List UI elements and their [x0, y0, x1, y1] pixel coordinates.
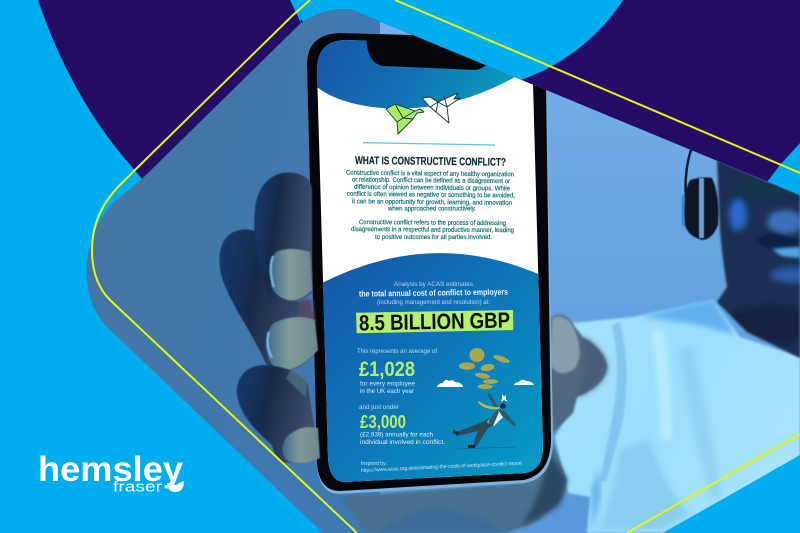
icon: white origami bird	[422, 93, 460, 123]
thumb	[548, 314, 607, 433]
illustration: falling man	[452, 393, 516, 449]
shirt	[555, 299, 800, 533]
text block: ACAS analysis: Analysis by ACAS estimates	[394, 281, 474, 288]
screen top blue curve	[317, 40, 515, 108]
text: per individual: (£2,939) annually for each	[360, 432, 433, 438]
text block: explanation: to positive outcomes for all parties involved.	[375, 234, 492, 241]
heading: what is constructive conflict: WHAT IS CONSTRUCTIVE CONFLICT?	[355, 155, 506, 169]
finger: ring	[237, 365, 320, 463]
photo backdrop right	[380, 0, 800, 533]
face and neck	[716, 160, 800, 359]
text block: definition: when approached constructively.	[387, 206, 476, 213]
finger: middle	[219, 229, 318, 372]
logo: hemsley fraser: fraser	[113, 478, 162, 496]
text block: ACAS analysis	[359, 281, 508, 306]
text block: definition	[346, 170, 515, 213]
finger: index	[254, 173, 312, 302]
text: per employee: for every employee	[360, 380, 415, 388]
shape: cyan corner	[768, 143, 800, 195]
text block: definition: it can be an opportunity for growth, learning, and innovation	[352, 198, 512, 207]
callout: 8.5 billion GBP: 8.5 BILLION GBP	[359, 308, 510, 335]
text block: definition: or relationship. Conflict can be defined as a disagreement or	[352, 176, 511, 185]
divider line	[363, 143, 495, 145]
text: source: https://www.acas.org.uk/estimating-the-costs-of-workplace-conflict-report	[361, 461, 522, 474]
shape: purple top right	[300, 0, 800, 200]
shape: top overlay clipped to photo edge	[300, 0, 800, 195]
text block: explanation: disagreements in a respectful and productive manner, leading	[351, 226, 514, 234]
illustration: clouds	[437, 380, 534, 387]
text: per individual	[360, 432, 444, 444]
text: average intro: This represents an average of	[357, 348, 437, 355]
phone frame	[307, 33, 553, 494]
text: just under: and just under	[359, 404, 400, 411]
text block: ACAS analysis: (including management and resolution) at:	[377, 299, 490, 306]
illustration: falling coins	[459, 348, 510, 389]
screen lower blue panel	[320, 253, 550, 490]
phone screen	[310, 35, 550, 490]
phone notch	[366, 39, 486, 70]
stat: £3,000: £3,000	[360, 411, 406, 432]
photo backdrop left	[60, 0, 380, 533]
text block: explanation: Constructive conflict refers to the process of addressing	[359, 219, 506, 227]
text block: definition: difference of opinion between individuals or groups. While	[354, 184, 510, 192]
shape: purple left arc	[38, 0, 301, 179]
icon: green origami bird	[386, 104, 424, 134]
shape: cyan circle	[300, 0, 624, 80]
text block: definition: Constructive conflict is a vital aspect of any healthy organization	[346, 170, 514, 178]
text: per employee	[360, 380, 415, 395]
text block: definition: conflict is often viewed as negative or something to be avoided,	[347, 191, 515, 199]
text block: ACAS analysis: the total annual cost of conflict to employers	[359, 287, 508, 299]
headphones	[682, 150, 718, 240]
screen white base	[310, 35, 550, 485]
text block: explanation	[351, 219, 514, 241]
wrist and palm below phone	[340, 443, 567, 533]
text: source: Inspired by:	[361, 461, 387, 467]
logo: hemsley fraser: hemsley	[38, 450, 184, 489]
text: per employee: in the UK each year	[360, 388, 415, 395]
stat: £1,028: £1,028	[359, 357, 415, 381]
text: per individual: individual involved in conflict.	[360, 439, 445, 446]
